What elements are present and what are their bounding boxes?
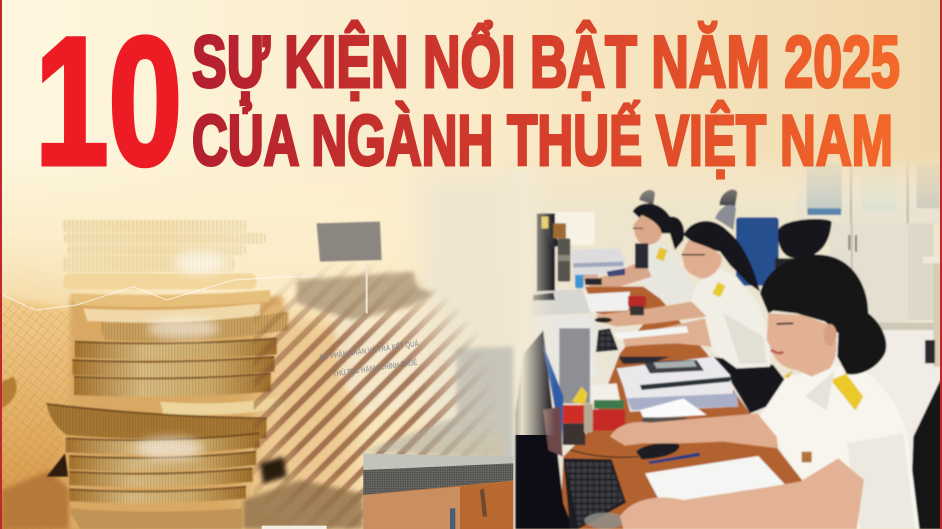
woman front: head and hair [760,255,886,377]
title number: 10 [35,0,182,203]
printer and documents [531,289,688,353]
woman front: shirt [758,365,919,529]
counter edge and monitors [537,213,598,292]
woman middle: seated [597,221,770,368]
pale coins [62,220,267,289]
soft backdrop behind partition [420,175,520,435]
ledger paper [2,297,83,529]
faint sign text: THỦ TỤC HÀNH CHÍNH THUẾ [332,357,418,379]
glass and granite counter [262,347,513,529]
glass partition fade [495,170,555,435]
chair at right [911,379,940,529]
coin highlights [137,252,225,460]
mouse and pen [570,443,700,464]
office wall [503,160,942,529]
faint sign text [319,338,419,379]
window opening [548,212,595,245]
gold coins [47,290,288,529]
trend line [3,277,320,310]
photo: tax officers at work [503,160,942,529]
faint sign text: BỘ PHẬN NHẬN VÀ TRẢ KẾT QUẢ [319,338,419,362]
desk [560,286,803,529]
woman far: seated [585,203,695,307]
back chairs [639,189,832,286]
glass cabinets [797,160,942,331]
paper stack far [572,248,625,277]
gold backdrop behind stack [70,297,283,529]
warm backdrop beside stack [243,310,353,529]
floor [832,330,940,462]
reception counter scene [243,222,513,529]
monitor back and red box [542,316,626,446]
paper stack and calculator [617,357,738,423]
front monitor and keyboard [515,330,626,529]
documents front [645,456,793,502]
coin stack and overlay [2,220,513,529]
woman middle: dark trousers [710,357,785,413]
woman front: arms and hands [610,413,864,529]
side cabinet [923,257,942,367]
